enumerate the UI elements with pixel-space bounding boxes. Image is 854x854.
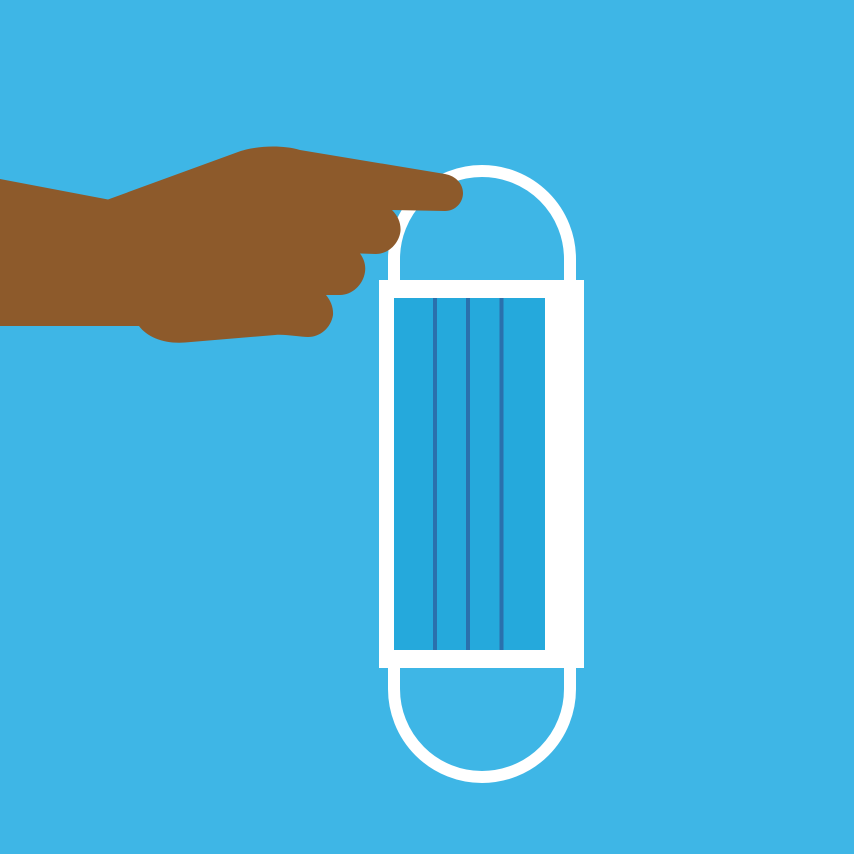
top ear loop [394, 171, 570, 285]
icon: hand pinching mask loop [0, 147, 463, 343]
mask pleats [433, 298, 504, 650]
mask fabric panel [394, 298, 545, 650]
bottom ear loop [394, 663, 570, 777]
mask body [379, 280, 584, 668]
icon: surgical face mask [379, 171, 584, 777]
